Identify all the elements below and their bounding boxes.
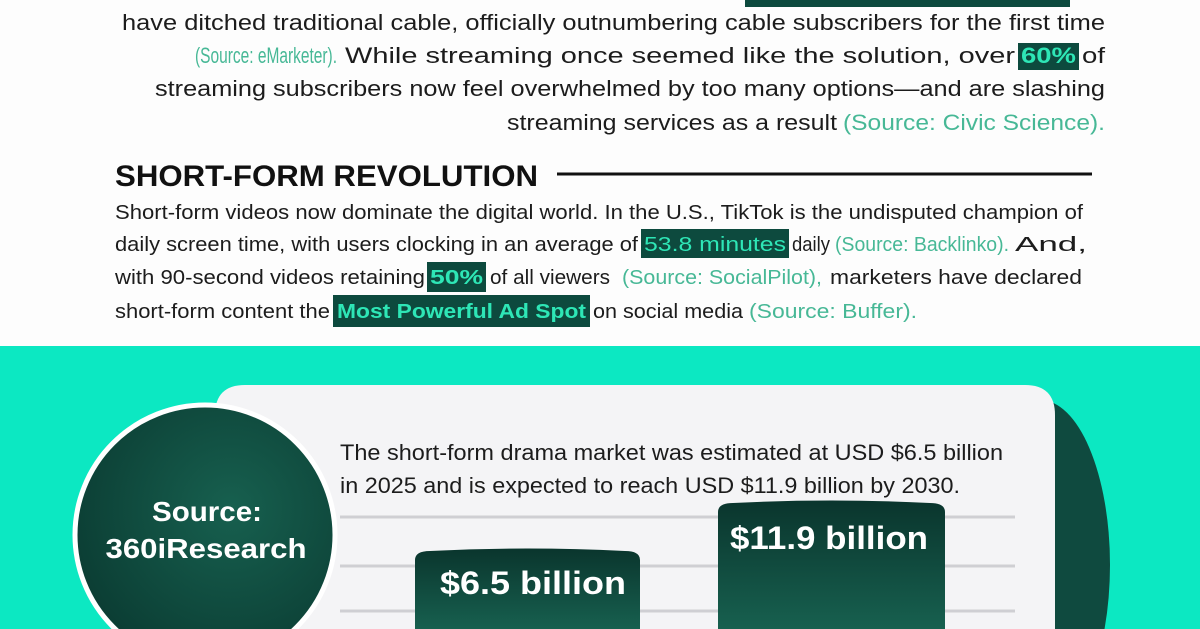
source circle: Source: — [152, 496, 262, 527]
intro paragraph — [122, 10, 1106, 135]
intro paragraph: (Source: eMarketer). — [195, 43, 337, 68]
short-form paragraph — [114, 202, 1087, 327]
card text: in 2025 and is expected to reach USD $11.9 billion by 2030. — [340, 473, 960, 498]
card: market chart — [215, 385, 1055, 629]
short-form paragraph: marketers have declared — [830, 267, 1082, 289]
source circle — [75, 405, 335, 629]
dark ellipse behind card — [970, 400, 1110, 629]
heading: short-form revolution: SHORT-FORM REVOLUTION — [115, 160, 538, 193]
short-form paragraph: And, — [1015, 234, 1087, 256]
intro paragraph: While streaming once seemed like the solution, over — [345, 43, 1015, 68]
top highlight bar — [745, 0, 1070, 7]
teal background band — [0, 346, 1200, 629]
short-form paragraph: on social media — [593, 301, 744, 323]
short-form paragraph: daily screen time, with users clocking in an average of — [115, 234, 638, 256]
source circle: 360iResearch — [106, 533, 306, 564]
bar: 2030 — [718, 500, 945, 629]
intro paragraph: (Source: Civic Science). — [843, 110, 1105, 135]
bar: 2025: $6.5 billion — [440, 565, 626, 601]
short-form paragraph: 53.8 minutes — [644, 234, 786, 256]
short-form paragraph: (Source: SocialPilot), — [622, 267, 822, 289]
short-form paragraph: short-form content the — [115, 301, 330, 323]
intro paragraph: have ditched traditional cable, officially outnumbering cable subscribers for the first time — [122, 10, 1105, 35]
short-form paragraph: Most Powerful Ad Spot — [337, 301, 586, 323]
intro paragraph: 60% — [1021, 43, 1076, 68]
short-form paragraph: (Source: Backlinko). — [835, 234, 1009, 256]
bar: 2030: $11.9 billion — [730, 520, 928, 556]
short-form paragraph: daily — [792, 234, 830, 256]
short-form paragraph: 50% — [430, 267, 483, 289]
short-form paragraph: Short-form videos now dominate the digital world. In the U.S., TikTok is the undisputed champion of — [115, 202, 1083, 224]
short-form paragraph: with 90-second videos retaining — [114, 267, 425, 289]
intro paragraph: streaming services as a result — [507, 110, 837, 135]
intro paragraph: of — [1082, 43, 1106, 68]
bar: 2025 — [415, 548, 640, 629]
short-form paragraph: of all viewers — [490, 267, 610, 289]
card text — [340, 440, 1003, 498]
short-form paragraph: (Source: Buffer). — [749, 301, 917, 323]
card text: The short-form drama market was estimated at USD $6.5 billion — [340, 440, 1003, 465]
intro paragraph: streaming subscribers now feel overwhelmed by too many options—and are slashing — [155, 76, 1105, 101]
